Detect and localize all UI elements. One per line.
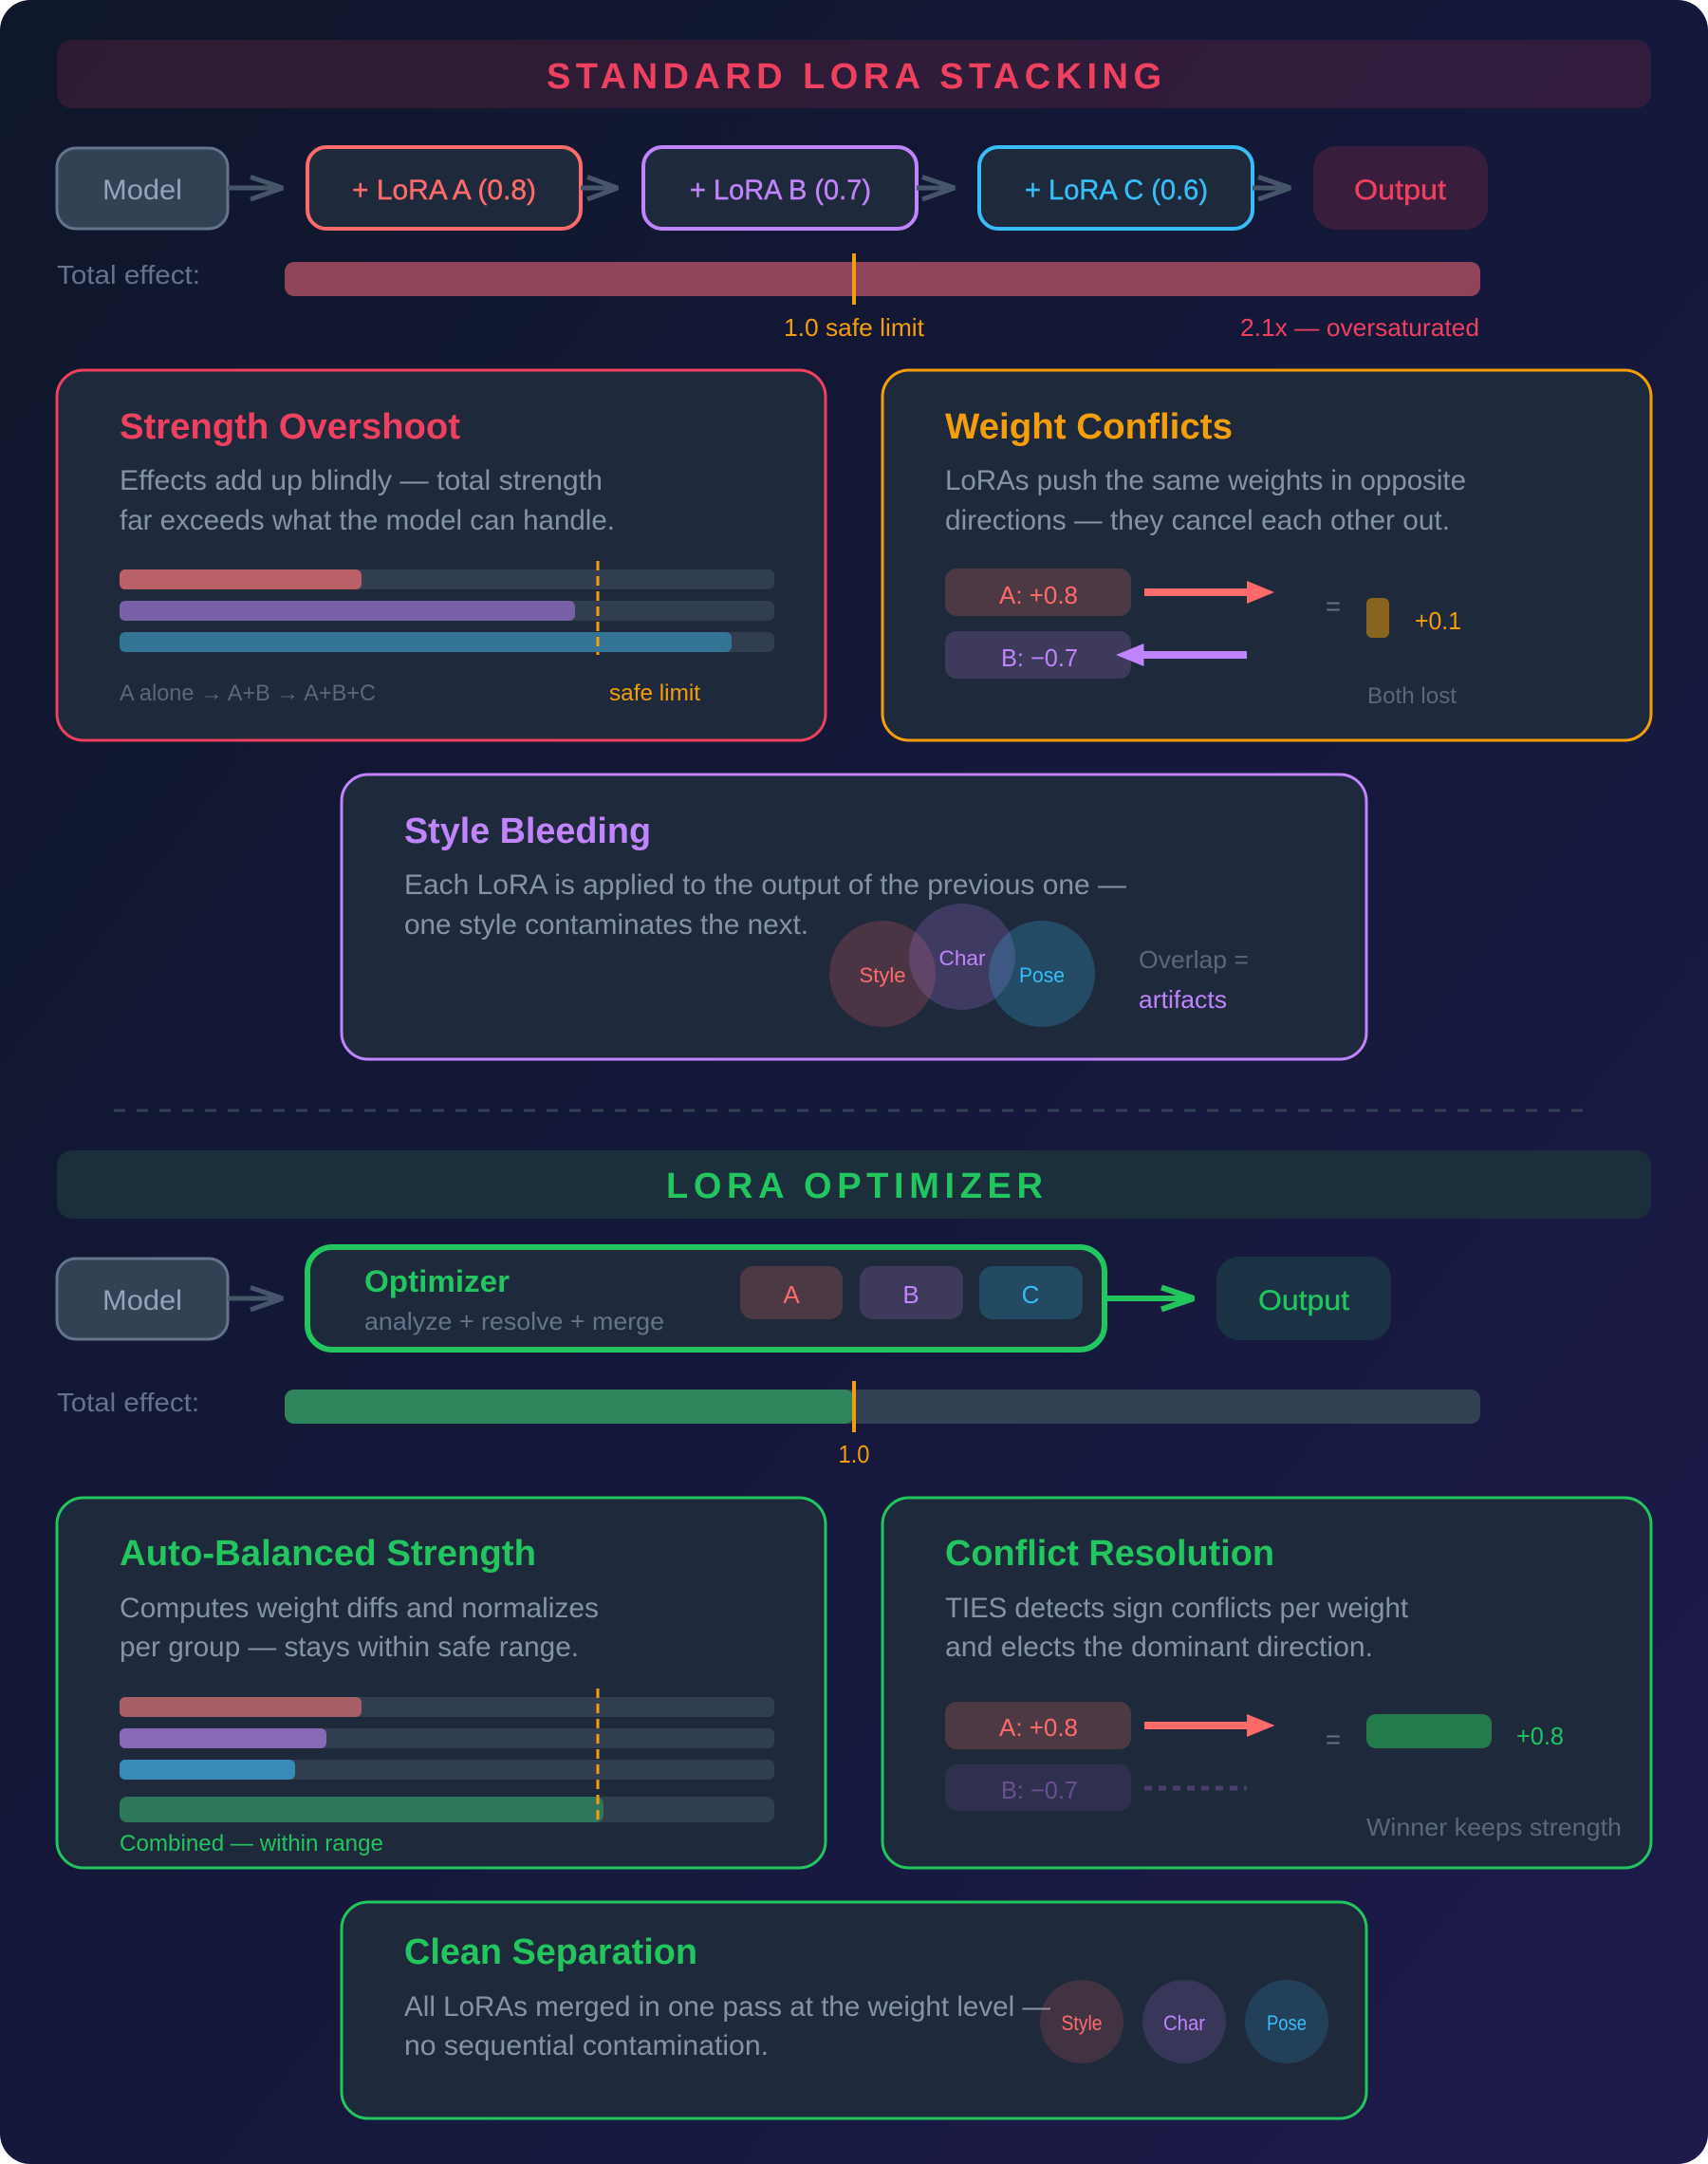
section header: standard lora stacking	[57, 40, 1651, 108]
result: cancelled	[1326, 591, 1461, 709]
note: overlap: artifacts	[1139, 985, 1227, 1014]
panel: weight conflicts	[882, 370, 1651, 740]
node: model: Model	[102, 1285, 182, 1316]
node: lora a: + LoRA A (0.8)	[352, 175, 536, 206]
node: lora b: + LoRA B (0.7)	[690, 175, 871, 206]
panel: conflict resolution	[882, 1498, 1651, 1868]
arrow: lora b to lora c	[917, 177, 955, 199]
separate circles diagram: Pose	[1267, 2011, 1307, 2035]
result: winner	[1326, 1714, 1622, 1841]
result: winner: Winner keeps strength	[1366, 1813, 1622, 1841]
panel: weight conflicts: directions — they cancel each other out.	[945, 505, 1450, 536]
node: optimizer: analyze + resolve + merge	[364, 1307, 664, 1335]
total effect bar: oversaturated	[285, 253, 1480, 342]
chip: c: C	[1022, 1280, 1039, 1309]
panel: auto-balanced strength: Combined — within range	[120, 1831, 383, 1856]
pill: a +0.8: A: +0.8	[999, 581, 1078, 609]
total effect bar: balanced: 1.0	[839, 1440, 869, 1468]
node: model	[57, 1259, 228, 1339]
pill: b -0.7 suppressed: B: −0.7	[1001, 1776, 1078, 1804]
panel: strength overshoot: far exceeds what the model can handle.	[120, 505, 615, 536]
section: standard lora stacking	[57, 40, 1651, 1059]
overlapping circles diagram	[829, 904, 1095, 1027]
node: lora a	[307, 147, 581, 229]
panel: clean separation: no sequential contamination.	[404, 2030, 769, 2061]
arrow: left	[1116, 644, 1247, 666]
panel: weight conflicts: LoRAs push the same weights in opposite	[945, 465, 1466, 496]
cumulative strength bars	[120, 561, 774, 655]
pill: a +0.8: A: +0.8	[999, 1713, 1078, 1742]
panel: strength overshoot: safe limit	[609, 681, 700, 706]
total effect bar: oversaturated: 2.1x — oversaturated	[1240, 313, 1479, 342]
node: model	[57, 148, 228, 229]
panel: auto-balanced strength	[57, 1498, 826, 1868]
node: lora b	[643, 147, 917, 229]
result: winner: +0.8	[1516, 1722, 1564, 1750]
pill: b -0.7 suppressed	[945, 1764, 1131, 1811]
panel: auto-balanced strength: Auto-Balanced Strength	[120, 1534, 536, 1574]
chip: c	[979, 1266, 1083, 1319]
overlapping circles diagram: Style	[860, 963, 905, 987]
node: output	[1216, 1257, 1391, 1340]
section header: lora optimizer	[57, 1150, 1651, 1219]
chip: b: B	[902, 1280, 919, 1309]
panel: style bleeding: Style Bleeding	[404, 812, 651, 851]
panel: strength overshoot: A alone → A+B → A+B+C	[120, 681, 376, 706]
normalized strength bars	[120, 1688, 774, 1825]
dashed line: suppressed direction	[1144, 1786, 1247, 1790]
note: overlap	[1139, 945, 1249, 1014]
arrow: model to lora a	[228, 177, 283, 199]
pill: a +0.8	[945, 1702, 1131, 1749]
total effect bar: balanced	[285, 1381, 1480, 1468]
result: cancelled: =	[1326, 591, 1341, 621]
separate circles diagram: Char	[1163, 2011, 1205, 2035]
node: lora c	[979, 147, 1253, 229]
panel: conflict resolution: TIES detects sign conflicts per weight	[945, 1593, 1409, 1624]
total effect bar: oversaturated: 1.0 safe limit	[784, 313, 925, 342]
panel: strength overshoot: Strength Overshoot	[120, 407, 460, 447]
panel: strength overshoot: Effects add up blindly — total strength	[120, 465, 603, 496]
overlapping circles diagram: Char	[939, 946, 985, 970]
panel: strength overshoot	[57, 370, 826, 740]
section: lora optimizer	[57, 1150, 1651, 2118]
result: cancelled: Both lost	[1367, 683, 1457, 709]
pill: a +0.8	[945, 569, 1131, 616]
label: total effect: Total effect:	[57, 1388, 199, 1417]
node: optimizer: Optimizer	[364, 1264, 510, 1298]
arrow: lora c to output	[1253, 177, 1290, 199]
panel: conflict resolution: Conflict Resolution	[945, 1534, 1274, 1574]
panel: style bleeding	[342, 774, 1366, 1059]
note: overlap: Overlap =	[1139, 945, 1249, 974]
arrow: lora a to lora b	[581, 177, 618, 199]
arrow: optimizer to output	[1105, 1287, 1194, 1310]
panel: clean separation: Clean Separation	[404, 1932, 697, 1972]
arrow: right	[1144, 581, 1274, 604]
label: total effect: Total effect:	[57, 260, 200, 289]
panel: clean separation	[342, 1902, 1366, 2118]
panel: style bleeding: one style contaminates the next.	[404, 909, 808, 941]
panel: weight conflicts: Weight Conflicts	[945, 407, 1233, 447]
panel: auto-balanced strength: Computes weight diffs and normalizes	[120, 1593, 599, 1624]
section header: lora optimizer: LORA OPTIMIZER	[666, 1166, 1043, 1206]
overlapping circles diagram: Pose	[1019, 963, 1065, 987]
node: lora c: + LoRA C (0.6)	[1025, 175, 1208, 206]
node: optimizer	[307, 1247, 1105, 1350]
arrow: model to optimizer	[228, 1287, 283, 1310]
pill: b -0.7	[945, 631, 1131, 679]
chip: b	[860, 1266, 963, 1319]
separate circles diagram: Style	[1061, 2011, 1103, 2035]
chip: a: A	[783, 1280, 800, 1309]
result: winner: =	[1326, 1725, 1341, 1754]
node: model: Model	[102, 175, 182, 206]
section header: standard lora stacking: STANDARD LORA STACKING	[547, 57, 1161, 97]
node: output	[1313, 146, 1488, 230]
panel: auto-balanced strength: per group — stays within safe range.	[120, 1632, 579, 1663]
pill: b -0.7: B: −0.7	[1001, 644, 1078, 672]
separate circles diagram	[1040, 1980, 1328, 2063]
arrow: right	[1144, 1714, 1275, 1737]
panel: clean separation: All LoRAs merged in one pass at the weight level —	[404, 1991, 1050, 2023]
result: cancelled: +0.1	[1415, 606, 1461, 635]
panel: style bleeding: Each LoRA is applied to the output of the previous one —	[404, 869, 1126, 901]
node: output: Output	[1258, 1285, 1350, 1316]
panel: conflict resolution: and elects the dominant direction.	[945, 1632, 1373, 1663]
node: output: Output	[1354, 175, 1447, 206]
chip: a	[740, 1266, 843, 1319]
